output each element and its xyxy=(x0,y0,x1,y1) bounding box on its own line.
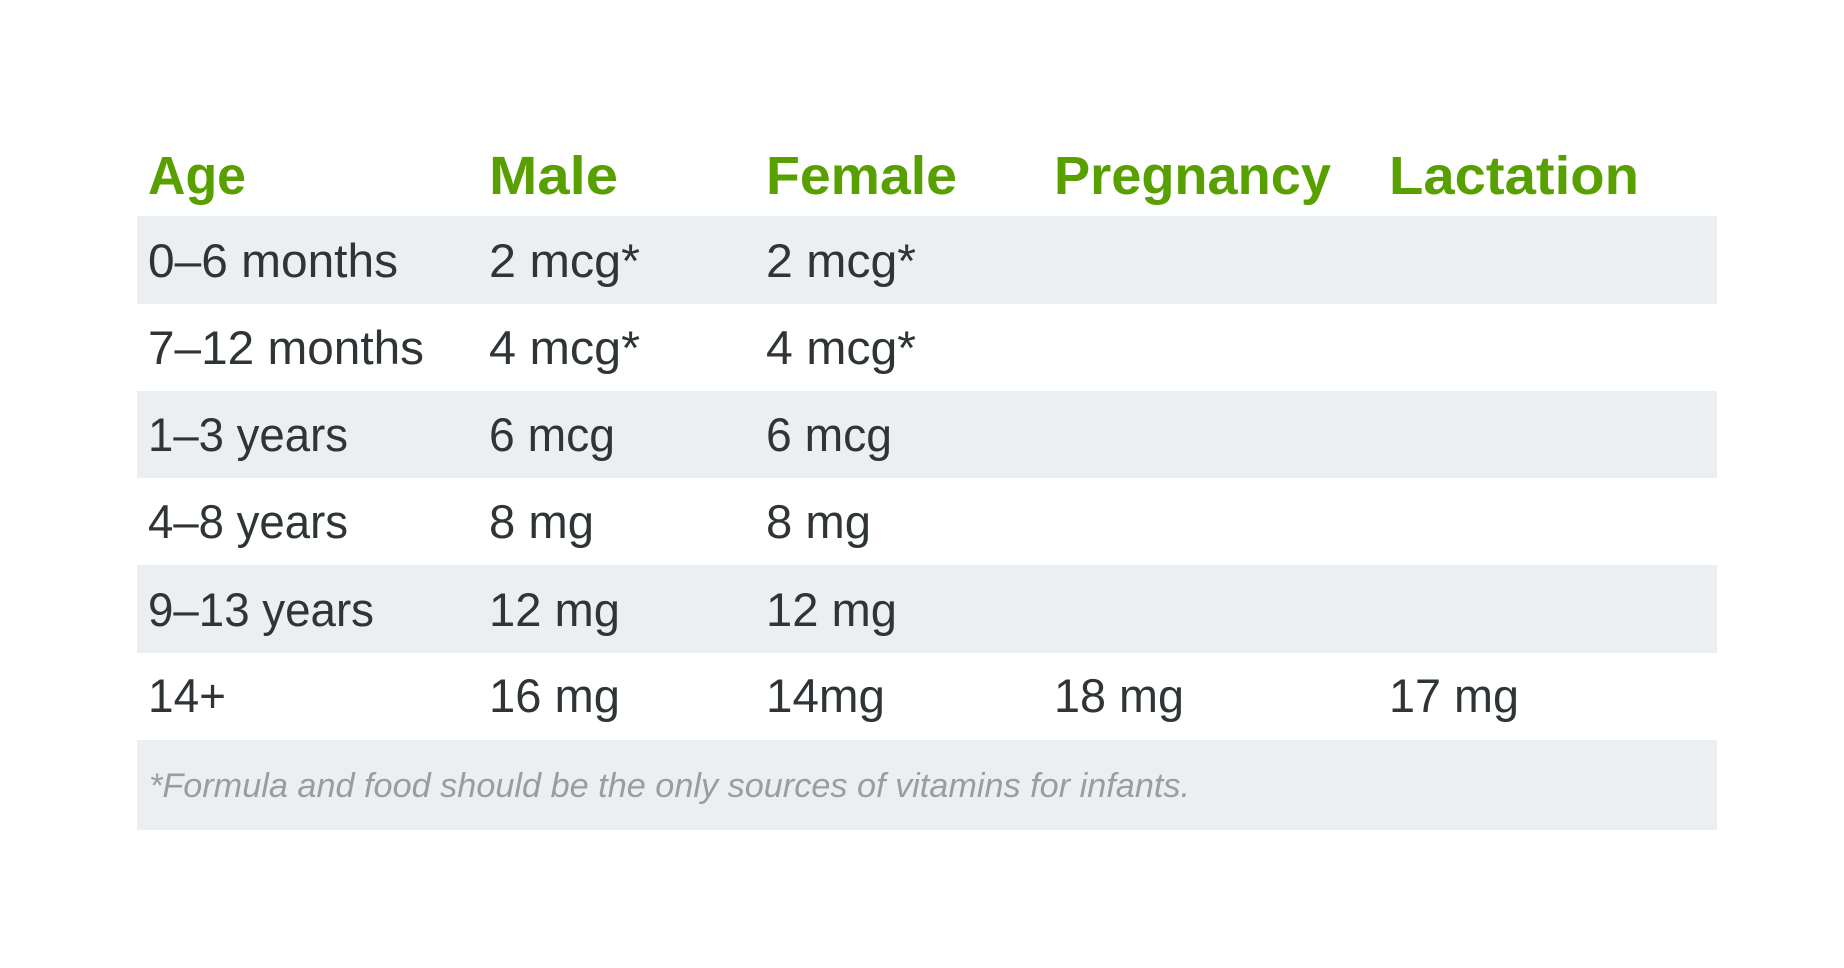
footnote row xyxy=(137,740,1717,830)
row: 4–8 years: 4–8 years xyxy=(148,495,348,548)
row: 4–8 years: 8 mg xyxy=(489,495,594,548)
table header row: Pregnancy xyxy=(1054,146,1331,206)
row: 7–12 months xyxy=(148,321,916,374)
row: 1–3 years: 6 mcg xyxy=(489,408,615,461)
row: 9–13 years: 12 mg xyxy=(489,583,620,636)
table header row: Male xyxy=(489,146,618,206)
row: 14+: 14mg xyxy=(766,669,885,722)
footnote row: *Formula and food should be the only sources of vitamins for infants. xyxy=(149,767,1190,805)
row: 7–12 months: 4 mcg* xyxy=(766,321,916,374)
row: 14+ xyxy=(148,669,1519,722)
table header row: Female xyxy=(766,146,957,206)
row: 14+: 14+ xyxy=(148,669,226,722)
row: 1–3 years: 6 mcg xyxy=(766,408,892,461)
row: 14+: 18 mg xyxy=(1054,669,1184,722)
row: 7–12 months: 7–12 months xyxy=(148,321,424,374)
row: 0–6 months: 0–6 months xyxy=(148,234,398,287)
row: 9–13 years: 12 mg xyxy=(766,583,897,636)
row: 0–6 months: 2 mcg* xyxy=(489,234,640,287)
table header row: Lactation xyxy=(1389,146,1639,206)
row: 1–3 years: 1–3 years xyxy=(148,408,348,461)
row: 0–6 months: 2 mcg* xyxy=(766,234,916,287)
row: 9–13 years xyxy=(137,565,1717,653)
table header row: Age xyxy=(148,146,246,206)
row: 4–8 years: 8 mg xyxy=(766,495,871,548)
row: 14+: 17 mg xyxy=(1389,669,1519,722)
row: 7–12 months: 4 mcg* xyxy=(489,321,640,374)
row: 1–3 years xyxy=(137,391,1717,478)
table header row xyxy=(148,146,1639,206)
row: 14+: 16 mg xyxy=(489,669,620,722)
row: 0–6 months xyxy=(137,216,1717,304)
row: 4–8 years xyxy=(148,495,871,548)
row: 9–13 years: 9–13 years xyxy=(148,583,374,636)
